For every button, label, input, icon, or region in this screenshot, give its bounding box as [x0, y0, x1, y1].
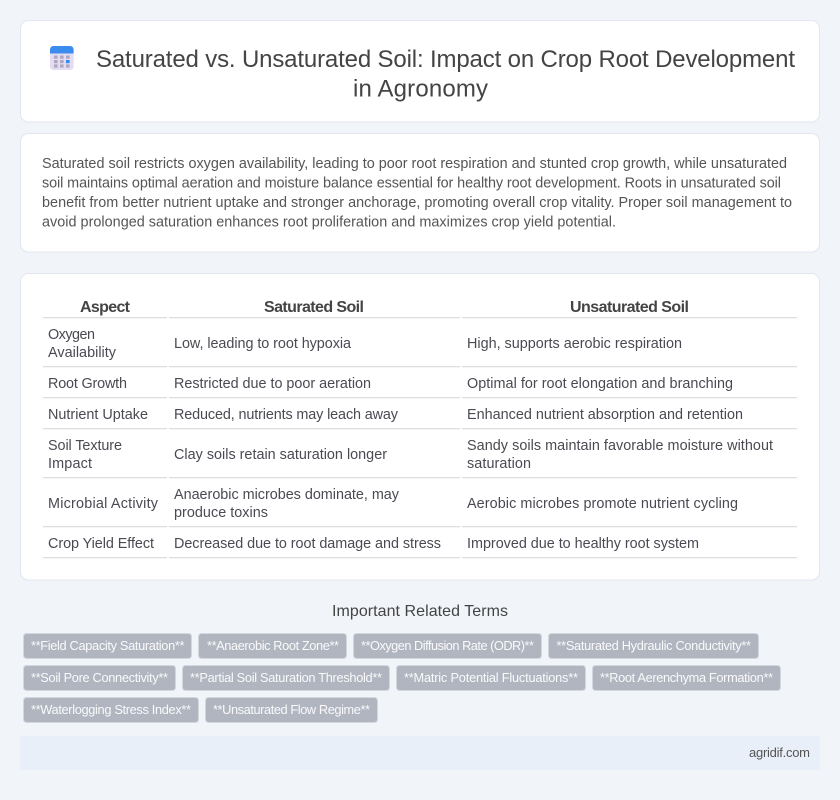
tag: [198, 634, 346, 658]
row: crop yield effect: Crop Yield Effect: [48, 536, 154, 552]
row: oxygen availability: Low, leading to root hypoxia: [174, 336, 351, 352]
tag: **Waterlogging Stress Index**: [31, 702, 191, 717]
row: nutrient uptake: Reduced, nutrients may leach away: [174, 407, 399, 423]
summary text: soil maintains optimal aeration and moisture balance essential for healthy root development. Roots in unsaturated soil: [42, 176, 781, 192]
tag: **Matric Potential Fluctuations**: [404, 670, 578, 685]
tag: [24, 666, 176, 690]
title: Saturated vs. Unsaturated Soil: Impact on Crop Root Development: [96, 46, 795, 73]
tag: **Unsaturated Flow Regime**: [213, 702, 370, 717]
panel: related term tags: [24, 634, 780, 722]
row: root growth: Optimal for root elongation and branching: [467, 376, 733, 392]
tag: [354, 634, 542, 658]
tag: [592, 666, 780, 690]
title: in Agronomy: [353, 76, 488, 102]
row: soil texture impact: saturation: [467, 456, 531, 472]
tag: **Saturated Hydraulic Conductivity**: [556, 638, 751, 653]
summary text: Saturated soil restricts oxygen availability, leading to poor root respiration and stunted crop growth, while unsaturated: [42, 156, 787, 172]
row: soil texture impact: Clay soils retain saturation longer: [174, 447, 387, 463]
tag: [548, 634, 758, 658]
row: oxygen availability: Oxygen: [48, 327, 95, 343]
tag: **Oxygen Diffusion Rate (ODR)**: [361, 638, 534, 653]
row: root growth: Restricted due to poor aeration: [174, 376, 371, 392]
row: crop yield effect: [43, 536, 797, 558]
title: [96, 46, 795, 102]
row: oxygen availability: High, supports aerobic respiration: [467, 336, 682, 352]
panel: summary paragraph: [20, 134, 820, 252]
tag: [24, 698, 198, 722]
summary text: [42, 156, 792, 230]
tag: **Root Aerenchyma Formation**: [600, 670, 773, 685]
table header row: Aspect: [80, 299, 131, 316]
icon: calendar: [50, 46, 74, 70]
row: soil texture impact: Impact: [48, 456, 92, 472]
row: crop yield effect: Improved due to healthy root system: [467, 536, 699, 552]
table header row: Saturated Soil: [264, 299, 364, 316]
summary text: avoid prolonged saturation enhances root proliferation and maximizes crop yield potential.: [42, 214, 616, 230]
row: root growth: Root Growth: [48, 376, 127, 392]
row: oxygen availability: [43, 327, 797, 367]
row: microbial activity: Microbial Activity: [48, 496, 159, 512]
row: soil texture impact: Sandy soils maintain favorable moisture without: [467, 438, 773, 454]
row: microbial activity: Aerobic microbes promote nutrient cycling: [467, 496, 738, 512]
row: nutrient uptake: [43, 407, 797, 429]
row: nutrient uptake: Nutrient Uptake: [48, 407, 148, 423]
tag: [182, 666, 390, 690]
row: microbial activity: produce toxins: [174, 505, 268, 521]
row: nutrient uptake: Enhanced nutrient absorption and retention: [467, 407, 743, 423]
row: soil texture impact: [43, 438, 797, 478]
table header row: Unsaturated Soil: [570, 299, 689, 316]
table header row: [43, 299, 797, 318]
row: microbial activity: [43, 487, 797, 527]
tag: [24, 634, 192, 658]
footer bar: agridif.com: [749, 745, 810, 760]
tag: **Field Capacity Saturation**: [31, 638, 185, 653]
tag: [206, 698, 378, 722]
footer bar: [20, 736, 820, 770]
row: oxygen availability: Availability: [48, 345, 117, 361]
summary text: benefit from better nutrient uptake and stronger anchorage, promoting overall crop vitality. Proper soil management to: [42, 195, 792, 211]
tag: **Anaerobic Root Zone**: [207, 638, 339, 653]
row: microbial activity: Anaerobic microbes dominate, may: [174, 487, 400, 503]
tag: **Soil Pore Connectivity**: [31, 670, 168, 685]
panel: title header: [20, 20, 820, 122]
panel: comparison table: [20, 274, 820, 580]
tag: **Partial Soil Saturation Threshold**: [190, 670, 382, 685]
row: soil texture impact: Soil Texture: [48, 438, 122, 454]
heading: related terms: Important Related Terms: [332, 603, 508, 620]
row: crop yield effect: Decreased due to root damage and stress: [174, 536, 441, 552]
row: root growth: [43, 376, 797, 398]
tag: [396, 666, 586, 690]
